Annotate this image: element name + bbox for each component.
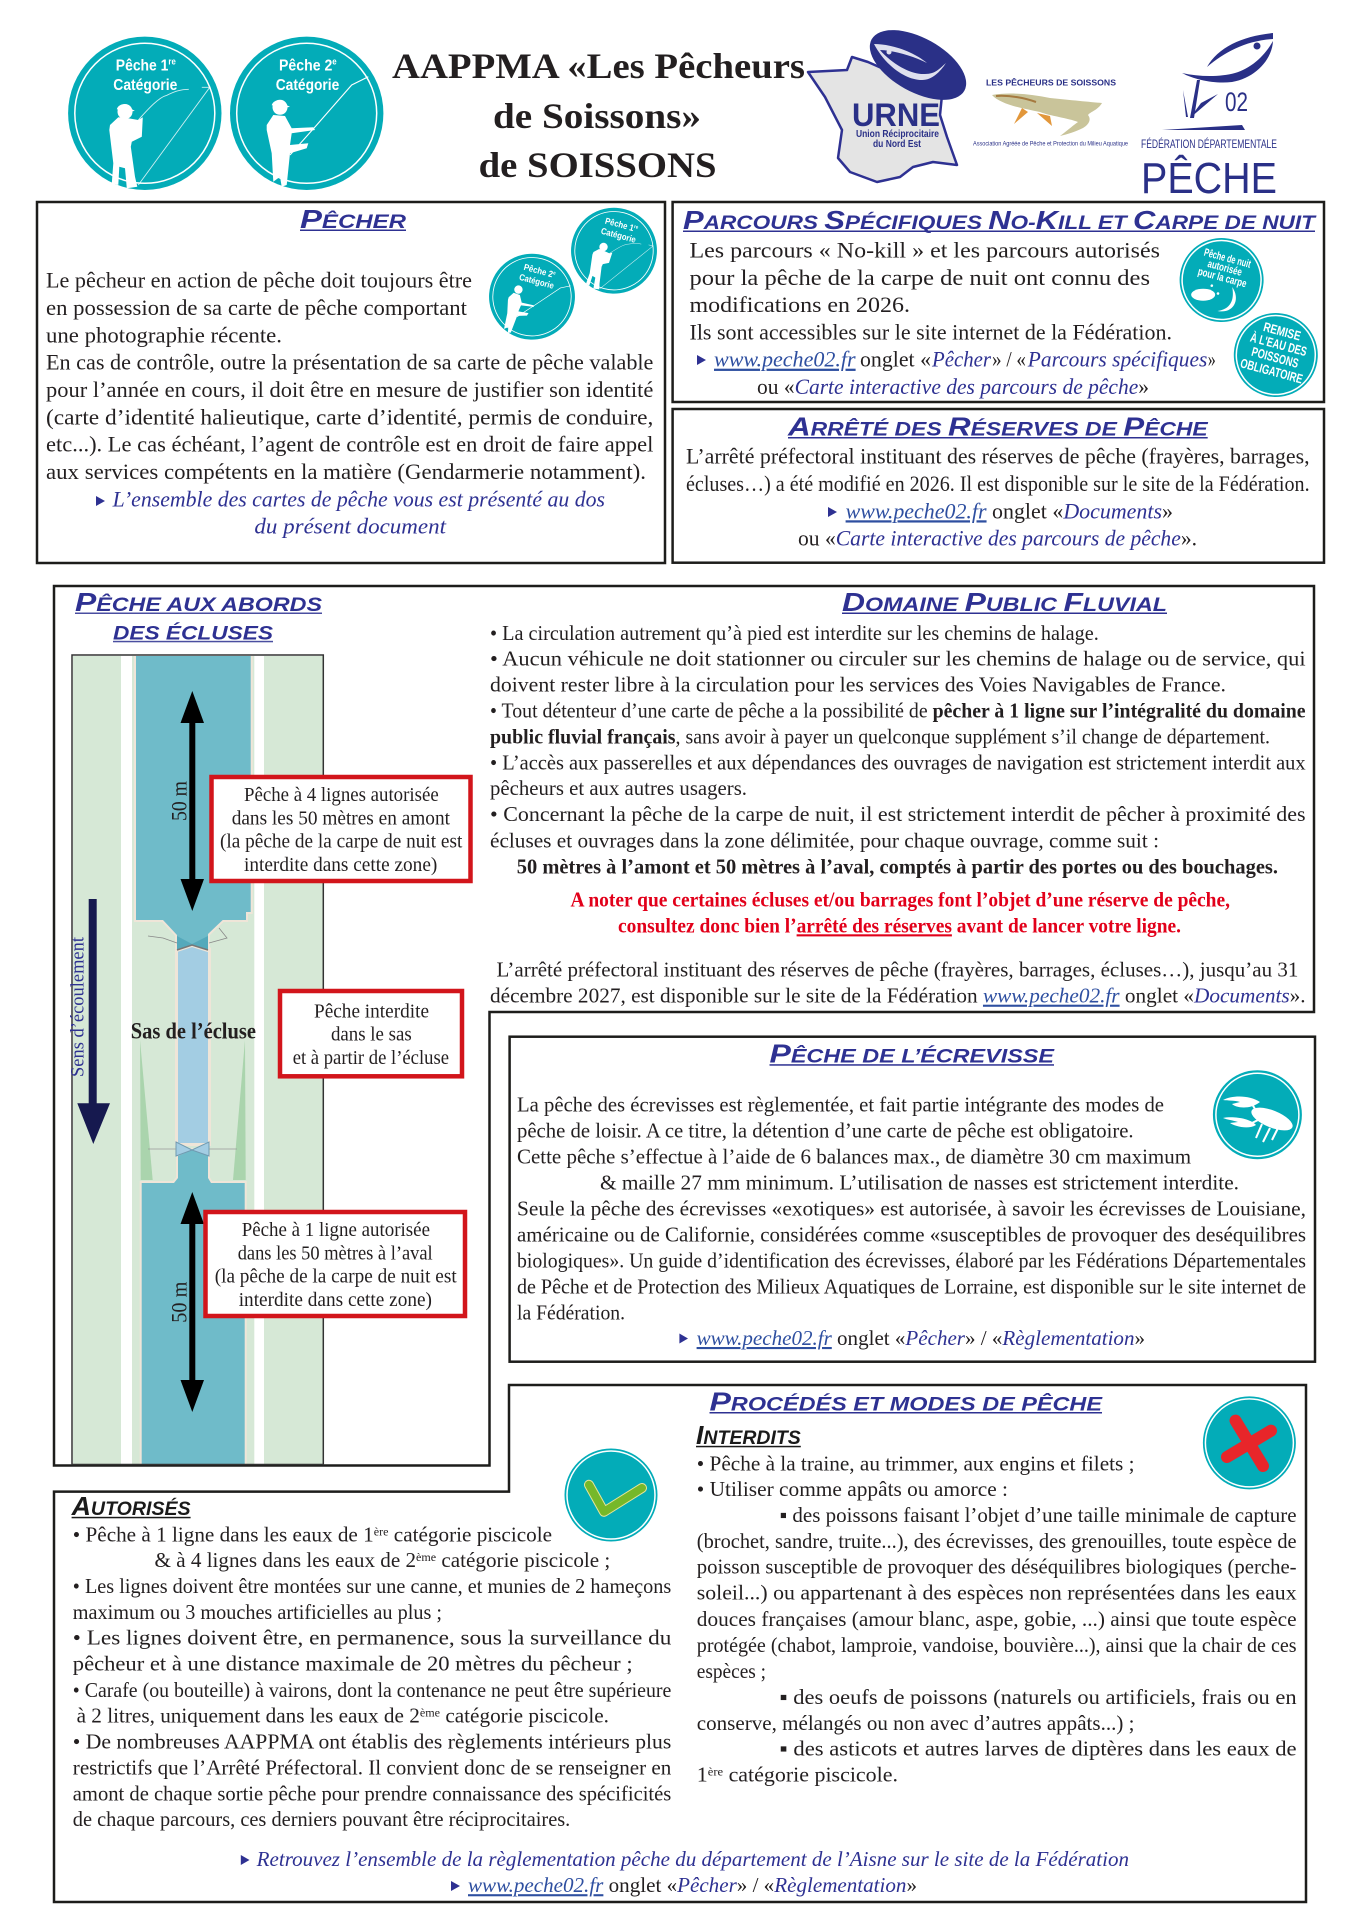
text: domaine public fluvial: écluses et ouvrages dans la zone délimitée, pour chaque ouvrage, comme suit : (490, 828, 1159, 852)
callout: retrouvez la règlementation (241, 1847, 1129, 1897)
badge: pêche 2e catégorie: e (332, 57, 337, 67)
panel: pêche de l'écrevisse (510, 1037, 1315, 1362)
column: interdits: ère (708, 1764, 723, 1778)
callout: pêche à 4 lignes: (la pêche de la carpe de nuit est (220, 832, 463, 853)
callout: pêche à 1 ligne: Pêche à 1 ligne autorisée (242, 1220, 430, 1241)
badge: pêche 1re catégorie: Catégorie (113, 77, 177, 94)
callout: pêche interdite: et à partir de l’écluse (293, 1048, 449, 1069)
column: autorisés: à 2 litres, uniquement dans les eaux de 2 (77, 1704, 417, 1728)
badge: pêche 1re catégorie: re (168, 57, 176, 67)
column: interdits: soleil...) ou appartenant à des espèces non représentées dans les eaux (697, 1581, 1297, 1605)
icon: autorisé (564, 1448, 658, 1542)
column: autorisés: pêcheur et à une distance maximale de 20 mètres du pêcheur ; (73, 1652, 633, 1676)
column: interdits: • Utiliser comme appâts ou amorce : (697, 1477, 1008, 1501)
callout: pêche à 1 ligne (206, 1212, 465, 1316)
text: parcours body: www.peche02.fr (714, 347, 856, 372)
column: autorisés: catégorie piscicole (389, 1522, 552, 1546)
callout: cartes de pêche: L’ensemble des cartes de pêche vous est présenté au dos (112, 486, 605, 511)
column: autorisés: • Les lignes doivent être, en permanence, sous la surveillance du (73, 1626, 672, 1650)
column: autorisés: • De nombreuses AAPPMA ont établis des règlements intérieurs plus (73, 1730, 671, 1754)
icon: remise à l'eau obligatoire (1224, 304, 1327, 406)
heading: pêche aux abords des écluses: PÊCHE AUX ABORDS (75, 587, 322, 617)
text: parcours body: modifications en 2026. (690, 292, 910, 317)
column: interdits: protégée (chabot, lamproie, vandoise, bouvière...), ainsi que la chair de ces (697, 1633, 1297, 1657)
arrow: 50 m aval: 50 m (166, 1281, 192, 1323)
text: arrêté body: www.peche02.fr onglet «Documents» (846, 498, 1173, 523)
column: autorisés: amont de chaque sortie pêche pour prendre connaissance des spécificités (73, 1782, 671, 1806)
text: écrevisse body: La pêche des écrevisses est règlementée, et fait partie intégrante des modes de (517, 1093, 1164, 1117)
logo: fédération de pêche 02: PÊCHE (1141, 154, 1277, 203)
logo: les pêcheurs de Soissons: LES PÊCHEURS DE SOISSONS (986, 77, 1116, 88)
text: arrêté body: ou «Carte interactive des parcours de pêche». (798, 526, 1197, 551)
heading: pêche de l'écrevisse: PÊCHE DE L’ÉCREVISSE (770, 1039, 1056, 1069)
column: interdits (696, 1420, 1297, 1786)
logo: fédération de pêche 02: FÉDÉRATION DÉPARTEMENTALE (1141, 138, 1277, 151)
text: arrêté préfectoral (490, 958, 1306, 1008)
lower gate (176, 1142, 209, 1156)
callout: pêche interdite: Pêche interdite (314, 1001, 429, 1022)
icon: écrevisse (1213, 1070, 1302, 1159)
subheading: interdits: INTERDITS (696, 1420, 801, 1450)
column: interdits: conserve, mélangés ou non avec d’autres appâts...) ; (697, 1711, 1134, 1735)
icon: badge pêche 1re catégorie: Catégorie (600, 226, 637, 245)
text: écrevisse body: de Pêche et de Protection des Milieux Aquatiques de Lorraine, est disponible sur le site internet de (517, 1274, 1306, 1298)
arrow: sens d'écoulement (77, 899, 110, 1144)
icon: badge pêche 1re catégorie: Pêche 1 (604, 216, 639, 234)
heading: parcours spécifiques: PARCOURS SPÉCIFIQUES NO-KILL ET CARPE DE NUIT (683, 205, 1317, 235)
column: autorisés: restrictifs que l’Arrêté Préfectoral. Il convient donc de se renseigner en (73, 1756, 672, 1780)
column: autorisés: ème (420, 1706, 440, 1720)
text: écrevisse body: pêche de loisir. A ce titre, la détention d’une carte de pêche est obligatoire. (517, 1119, 1134, 1143)
heading: pêche aux abords des écluses: DES ÉCLUSES (113, 622, 273, 644)
text: pêcher body: (carte d’identité halieutique, carte d’identité, permis de conduire, (46, 404, 653, 429)
text: pêcher body: En cas de contrôle, outre la présentation de sa carte de pêche valable (46, 350, 653, 375)
label: sas de l'écluse: Sas de l’écluse (131, 1018, 256, 1043)
column: interdits: catégorie piscicole. (723, 1762, 898, 1786)
heading: pêcher: PÊCHER (300, 204, 406, 234)
text: domaine public fluvial: doivent rester libre à la circulation pour les services des Voies Navigables de France. (490, 673, 1226, 697)
column: autorisés: • Les lignes doivent être montées sur une canne, et munies de 2 hameçons (73, 1574, 671, 1598)
text: écrevisse body: Seule la pêche des écrevisses «exotiques» est autorisée, à savoir les écrevisses de Louisiane, (517, 1197, 1306, 1221)
column: autorisés (71, 1491, 672, 1831)
panel: pêcher (37, 198, 667, 563)
column: autorisés: & à 4 lignes dans les eaux de 2 (154, 1548, 415, 1572)
icon: badge pêche 1re catégorie: re (633, 224, 639, 231)
column: autorisés: • Pêche à 1 ligne dans les eaux de 1 (73, 1522, 371, 1546)
icon: pêche de nuit autorisée: Pêche de nuit (1203, 247, 1252, 271)
callout: pêche à 4 lignes: dans les 50 mètres en amont (232, 808, 451, 829)
downstream water (142, 1150, 245, 1470)
icon: badge pêche 1re catégorie (561, 198, 667, 303)
title: de SOISSONS (479, 145, 717, 185)
text: arrêté body (686, 444, 1310, 551)
heading: domaine public fluvial: DOMAINE PUBLIC FLUVIAL (842, 587, 1167, 617)
logo: les pêcheurs de Soissons: Association Agréée de Pêche et Protection du Milieu Aquatique (973, 142, 1129, 148)
badge: pêche 1re catégorie (68, 37, 222, 190)
text: parcours body: » (1208, 347, 1216, 372)
callout: retrouvez la règlementation: www.peche02.fr onglet «Pêcher» / «Règlementation» (468, 1873, 917, 1897)
diagram: plan de l'écluse (72, 650, 323, 1470)
icon: remise à l'eau obligatoire: À L'EAU DES (1249, 330, 1309, 359)
panel: abords des écluses et domaine public fluvial (54, 586, 1314, 1470)
text: domaine public fluvial (490, 621, 1306, 878)
text: écrevisse body: & maille 27 mm minimum. L’utilisation de nasses est strictement interdite. (600, 1171, 1239, 1195)
column: interdits: ▪ des poissons faisant l’objet d’une taille minimale de capture (780, 1503, 1297, 1527)
callout: pêche interdite (280, 991, 462, 1076)
text: parcours body: » / « (992, 347, 1026, 372)
text: pêcher body: une photographie récente. (46, 322, 282, 347)
badge: pêche 2e catégorie: Catégorie (276, 77, 339, 94)
text: parcours body: Parcours spécifiques (1027, 347, 1208, 372)
text: écrevisse body: la Fédération. (517, 1300, 625, 1324)
callout: pêche interdite: dans le sas (331, 1025, 412, 1046)
column: autorisés: ère (374, 1524, 389, 1538)
heading: pêche aux abords des écluses (75, 587, 322, 644)
callout: pêche à 4 lignes: Pêche à 4 lignes autorisée (244, 785, 439, 806)
callout: réserve de pêche (570, 888, 1230, 937)
icon: badge pêche 2e catégorie: e (552, 270, 556, 277)
text: domaine public fluvial: • Aucun véhicule ne doit stationner ou circuler sur les chemins de halage ou de service, qui (490, 647, 1306, 671)
arrow: 50 m amont: 50 m (166, 781, 192, 821)
logo: fédération de pêche 02: 02 (1225, 87, 1248, 117)
text: écrevisse body: Cette pêche s’effectue à l’aide de 6 balances max., de diamètre 30 cm maximum (517, 1145, 1191, 1169)
label: sens d'écoulement: Sens d’écoulement (67, 936, 88, 1077)
text: écrevisse body (517, 1093, 1306, 1350)
text: domaine public fluvial: • Concernant la pêche de la carpe de nuit, il est strictement interdit de pêcher à proximité des (490, 802, 1306, 826)
panel: arrêté des réserves (673, 409, 1324, 563)
column: interdits: (brochet, sandre, truite...), des écrevisses, des grenouilles, toute espèce de (697, 1529, 1297, 1553)
text: écrevisse body: www.peche02.fr onglet «Pêcher» / «Règlementation» (697, 1326, 1145, 1350)
logo: les pêcheurs de Soissons (973, 77, 1129, 148)
column: autorisés: • Carafe (ou bouteille) à vairons, dont la contenance ne peut être supérieure (73, 1678, 671, 1702)
logo: URNE (808, 16, 977, 182)
column: autorisés: catégorie piscicole ; (436, 1548, 610, 1572)
text: pêcher body: etc...). Le cas échéant, l’agent de contrôle est en droit de faire appel (46, 432, 653, 457)
callout: pêche à 4 lignes (212, 777, 470, 881)
text: parcours body: Ils sont accessibles sur le site internet de la Fédération. (690, 319, 1172, 344)
callout: réserve de pêche: A noter que certaines écluses et/ou barrages font l’objet d’une réserve de pêche, (570, 888, 1230, 912)
triangles (140, 1040, 153, 1180)
callout: pêche à 1 ligne: dans les 50 mètres à l’aval (238, 1243, 433, 1264)
callout: cartes de pêche: du présent document (254, 514, 447, 539)
column: interdits: ▪ des asticots et autres larves de diptères dans les eaux de (780, 1736, 1297, 1760)
title: de Soissons» (493, 96, 701, 136)
text: arrêté body: L’arrêté préfectoral instituant des réserves de pêche (frayères, barrages, (686, 444, 1310, 469)
icon: pêche de nuit autorisée: pour la carpe (1196, 266, 1248, 290)
callout: pêche à 4 lignes: interdite dans cette zone) (244, 855, 437, 876)
arrow: 50 m aval (166, 1192, 204, 1412)
heading: arrêté des réserves: ARRÊTÉ DES RÉSERVES DE PÊCHE (787, 412, 1209, 442)
panel: parcours spécifiques (673, 202, 1327, 406)
icon: badge pêche 2e catégorie (479, 244, 585, 349)
text: parcours body: ou «Carte interactive des parcours de pêche» (757, 374, 1149, 399)
text: pêcher body: aux services compétents en la matière (Gendarmerie notamment). (46, 459, 646, 484)
column: interdits: • Pêche à la traine, au trimmer, aux engins et filets ; (697, 1451, 1134, 1475)
icon: pêche de nuit autorisée (1170, 229, 1273, 331)
column: autorisés: de chaque parcours, ces derniers pouvant être réciprocitaires. (73, 1807, 570, 1831)
text: parcours body: pour la pêche de la carpe de nuit ont connu des (690, 265, 1150, 290)
text: parcours body: Pêcher (931, 347, 991, 372)
panel: procédés et modes de pêche (54, 1385, 1306, 1902)
heading: procédés et modes de pêche: PROCÉDÉS ET MODES DE PÊCHE (710, 1386, 1104, 1416)
text: parcours body (690, 237, 1216, 399)
lock chamber (178, 945, 208, 1143)
title (392, 46, 805, 185)
text: domaine public fluvial: 50 mètres à l’amont et 50 mètres à l’aval, comptés à partir des portes ou des bouchages. (517, 854, 1278, 878)
text: parcours body: onglet « (860, 347, 931, 372)
column: interdits: ▪ des oeufs de poissons (naturels ou artificiels, frais ou en (780, 1685, 1297, 1709)
text: pêcher body: Le pêcheur en action de pêche doit toujours être (46, 268, 472, 293)
column: interdits: espèces ; (697, 1659, 766, 1683)
icon: remise à l'eau obligatoire: OBLIGATOIRE (1239, 355, 1305, 387)
text: domaine public fluvial: pêcheurs et aux autres usagers. (490, 776, 747, 800)
text: pêcher body (46, 268, 653, 484)
text: écrevisse body: américaine ou de Californie, considérées comme «susceptibles de provoquer des deséquilibres (517, 1222, 1306, 1246)
callout: réserve de pêche: consultez donc bien l’arrêté des réserves avant de lancer votre ligne. (618, 913, 1181, 937)
text: domaine public fluvial: • L’accès aux passerelles et aux dépendances des ouvrages de navigation est strictement interdit aux (490, 750, 1306, 774)
text: parcours body: Les parcours « No-kill » et les parcours autorisés (690, 237, 1160, 262)
logo: fédération de pêche 02 (1141, 33, 1277, 203)
text: pêcher body: en possession de sa carte de pêche comportant (46, 295, 468, 320)
column: interdits: douces françaises (amour blanc, aspe, gobie, ...) ainsi que toute espèce (697, 1607, 1297, 1631)
badge: pêche 2e catégorie: Pêche 2 (279, 58, 339, 75)
icon: interdit (1203, 1396, 1296, 1489)
icon: pêche de nuit autorisée: autorisée (1206, 258, 1243, 279)
column: autorisés: ème (416, 1550, 436, 1564)
subheading: autorisés: AUTORISÉS (71, 1491, 191, 1521)
text: domaine public fluvial: public fluvial français, sans avoir à payer un quelconque supplément s’il change de département. (490, 725, 1270, 749)
column: interdits: 1 (697, 1762, 707, 1786)
text: arrêté préfectoral: L’arrêté préfectoral instituant des réserves de pêche (frayères, barrages, écluses…), jusqu’au 31 (496, 958, 1298, 982)
callout: cartes de pêche (96, 486, 605, 539)
title: AAPPMA «Les Pêcheurs (392, 46, 805, 86)
arrow: 50 m amont (166, 691, 204, 911)
upstream water (136, 650, 251, 950)
logo: URNE: Union Réciprocitaire (856, 128, 939, 140)
text: pêcher body: pour l’année en cours, il doit être en mesure de justifier son identité (46, 377, 653, 402)
text: domaine public fluvial: • La circulation autrement qu’à pied est interdite sur les chemins de halage. (490, 621, 1099, 645)
column: interdits: poisson susceptible de provoquer des déséquilibres biologiques (perche- (697, 1555, 1297, 1579)
icon: badge pêche 2e catégorie: Pêche 2 (523, 262, 558, 280)
callout: retrouvez la règlementation: Retrouvez l’ensemble de la règlementation pêche du département de l’Aisne sur le site de la Fédération (256, 1847, 1129, 1871)
text: arrêté préfectoral: décembre 2027, est disponible sur le site de la Fédération www.peche02.fr onglet «Documents». (490, 984, 1306, 1008)
column: autorisés: maximum ou 3 mouches artificielles au plus ; (73, 1600, 442, 1624)
icon: remise à l'eau obligatoire: REMISE (1262, 319, 1303, 344)
upper gate (177, 936, 208, 950)
badge: pêche 2e catégorie (230, 37, 383, 190)
badge: pêche 1re catégorie: Pêche 1 (116, 58, 176, 75)
callout: pêche à 1 ligne: interdite dans cette zone) (239, 1290, 432, 1311)
column: autorisés: catégorie piscicole. (440, 1704, 609, 1728)
callout: pêche à 1 ligne: (la pêche de la carpe de nuit est (215, 1267, 457, 1288)
logo: URNE: URNE (852, 97, 940, 133)
text: écrevisse body: biologiques». Un guide d’identification des écrevisses, élaboré par les Fédérations Départementales (517, 1248, 1306, 1272)
icon: remise à l'eau obligatoire: POISSONS (1250, 344, 1300, 371)
logo: URNE: du Nord Est (873, 138, 921, 150)
text: domaine public fluvial: • Tout détenteur d’une carte de pêche a la possibilité de pêcher à 1 ligne sur l’intégralité du domaine (490, 699, 1306, 723)
icon: badge pêche 2e catégorie: Catégorie (518, 272, 555, 291)
